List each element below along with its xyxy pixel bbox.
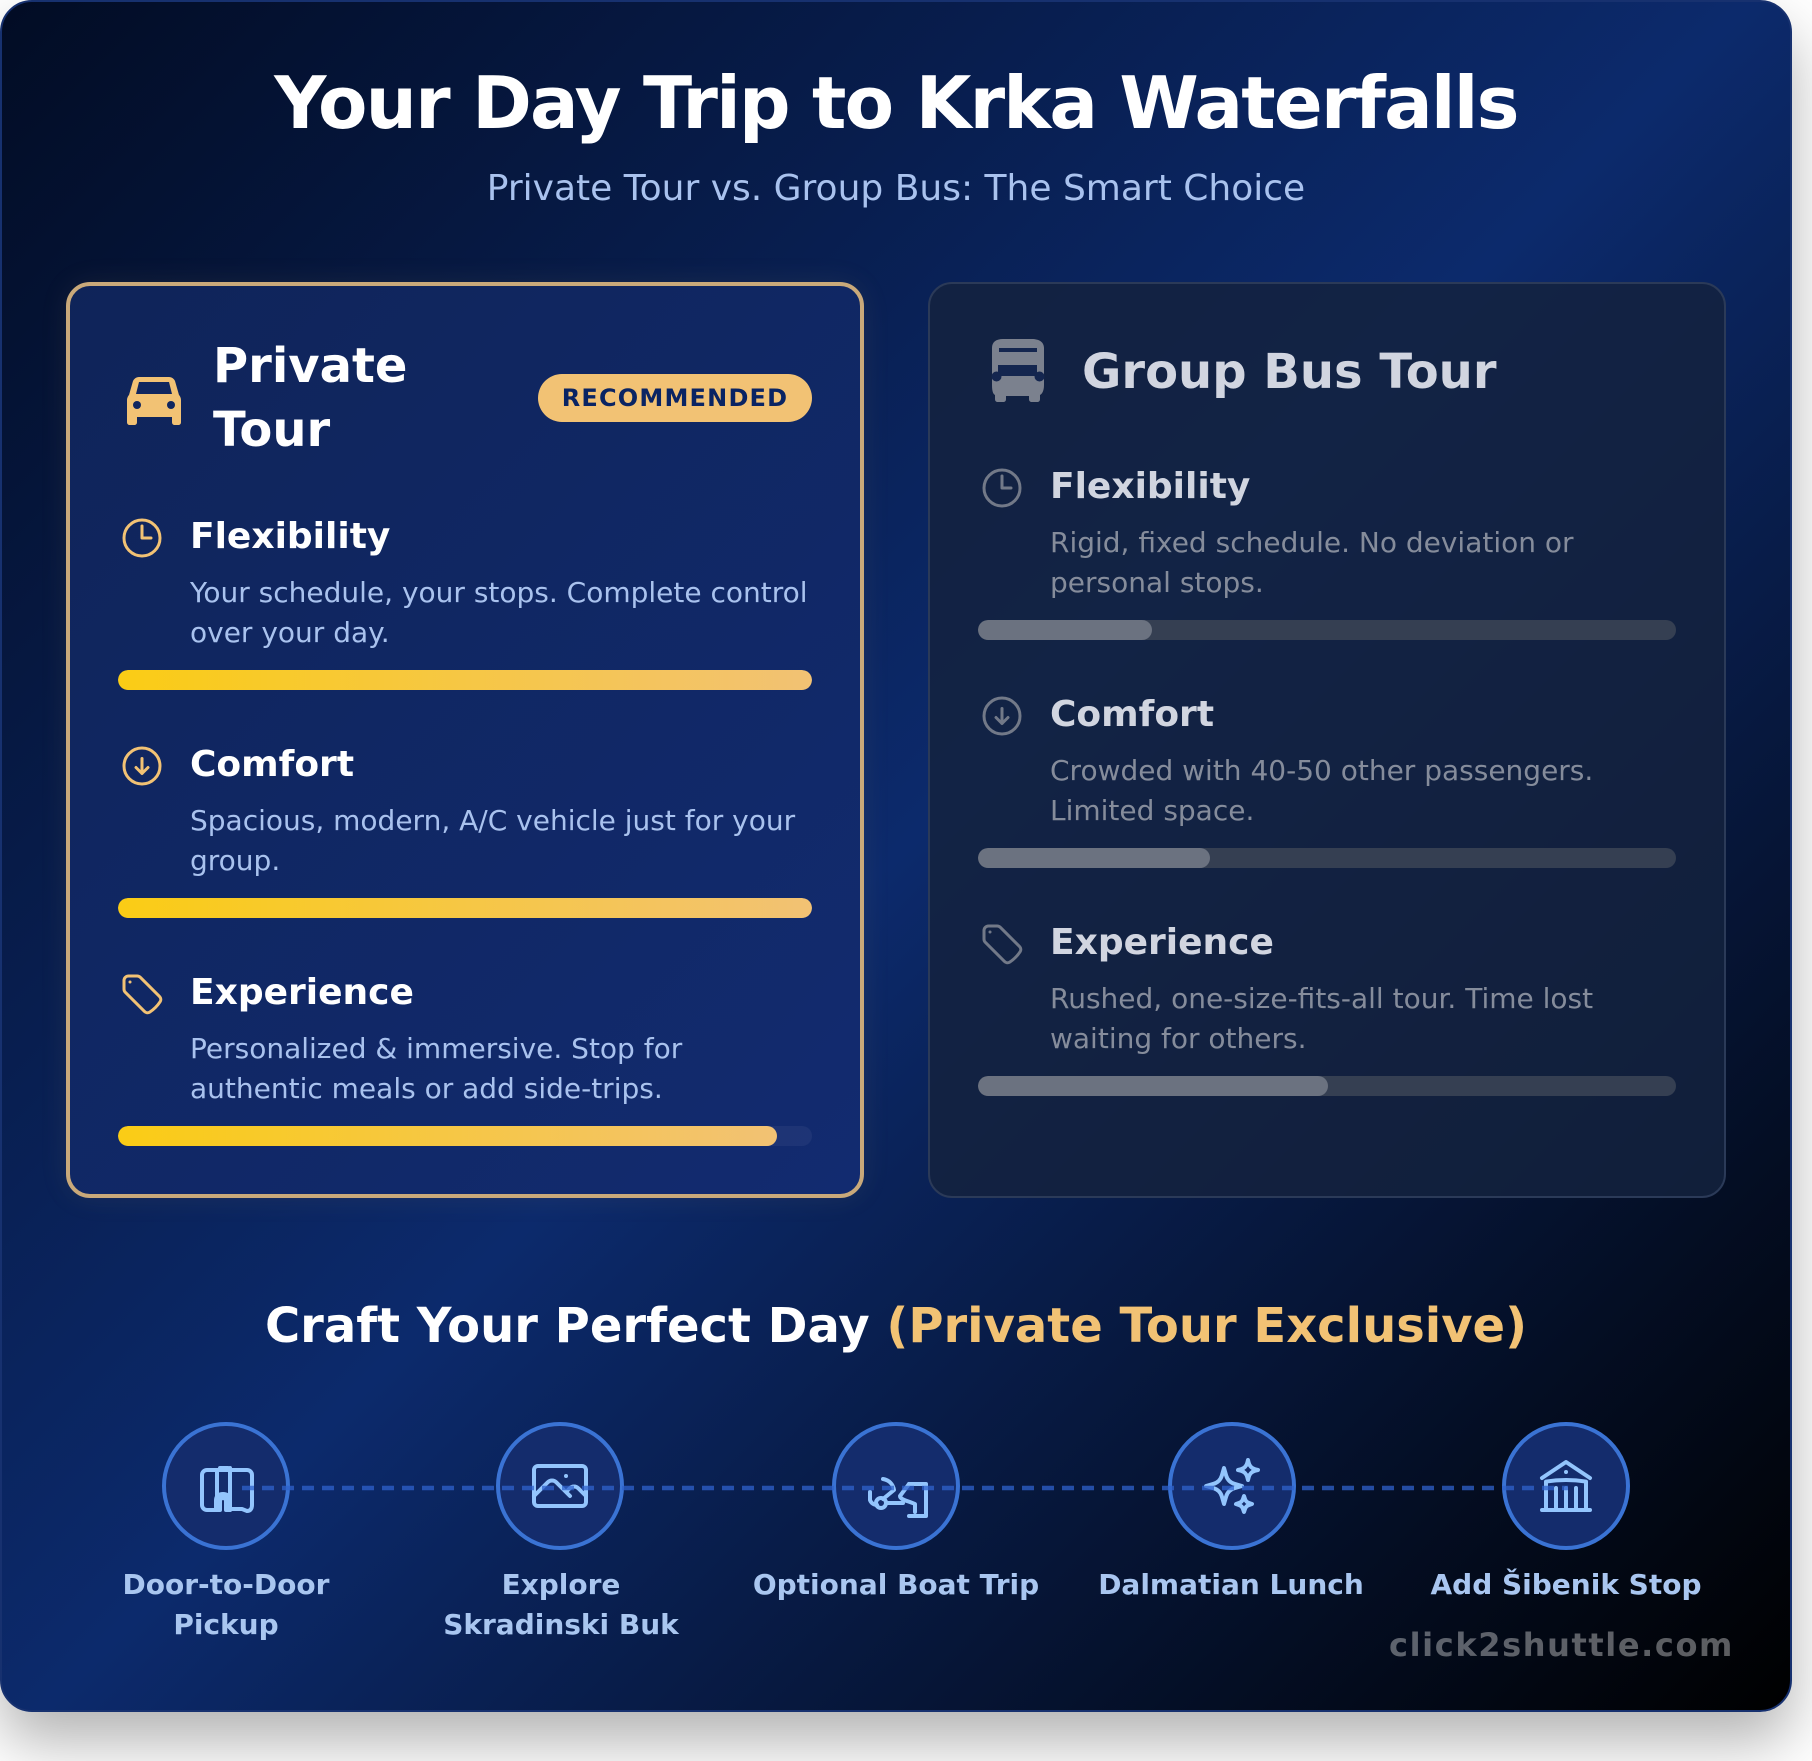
connector: dashed line: [242, 1486, 1568, 1490]
score bar: [118, 670, 812, 690]
step: add sibenik stop: [1430, 1422, 1702, 1601]
watermark: click2shuttle.com: [1389, 1626, 1734, 1664]
icon circle: image: [496, 1422, 624, 1550]
item text: [190, 1032, 682, 1104]
feature: flexibility (group): personal stops.: [1050, 566, 1264, 598]
feature: comfort (group): Limited space.: [1050, 794, 1254, 826]
label: Dalmatian Lunch: [1098, 1568, 1364, 1601]
item title: Flexibility: [190, 516, 390, 557]
badge: recommended: RECOMMENDED: [562, 384, 788, 412]
item title: Experience: [190, 972, 414, 1013]
label: Explore: [502, 1568, 620, 1601]
item text: [190, 804, 796, 876]
step: optional boat trip: [753, 1422, 1039, 1601]
icon: car: [127, 377, 181, 425]
item text: [1050, 526, 1574, 598]
icon: tag: [982, 924, 1022, 964]
feature: comfort (private): group.: [190, 844, 280, 876]
score bar: [118, 1126, 812, 1146]
step: dalmatian lunch: [1098, 1422, 1364, 1601]
feature: experience (private): authentic meals or add side-trips.: [190, 1072, 663, 1104]
item title: Comfort: [190, 744, 354, 785]
feature: experience (group): waiting for others.: [1050, 1022, 1306, 1054]
icon: arrow down circle: [122, 746, 162, 786]
icon: bus: [992, 339, 1044, 402]
badge: recommended: [538, 374, 812, 422]
feature: flexibility (private): [118, 516, 812, 690]
subtitle: Private Tour vs. Group Bus: The Smart Choice: [487, 168, 1305, 209]
icon circle: sparkles: [1168, 1422, 1296, 1550]
item text: Personalized & immersive. Stop for: [190, 1032, 682, 1064]
score bar: [978, 620, 1676, 640]
panel: private tour: [66, 282, 864, 1198]
feature: flexibility (private): over your day.: [190, 616, 390, 648]
item title: Experience: [1050, 922, 1274, 963]
panel: group bus tour: [928, 282, 1726, 1198]
label: Optional Boat Trip: [753, 1568, 1039, 1601]
icon circle: boat: [832, 1422, 960, 1550]
score bar: [978, 848, 1676, 868]
label line 2: Skradinski Buk: [443, 1608, 679, 1641]
item text: [190, 576, 808, 648]
heading: private tour: Tour: [213, 402, 330, 458]
title: Your Day Trip to Krka Waterfalls: [274, 61, 1518, 145]
item text: [1050, 754, 1593, 826]
score bar: [978, 1076, 1676, 1096]
step: explore skradinski buk: [443, 1422, 680, 1641]
item text: Rigid, fixed schedule. No deviation or: [1050, 526, 1574, 558]
step: door-to-door pickup: [123, 1422, 330, 1641]
heading: private tour: [213, 338, 407, 458]
heading: group bus tour: Group Bus Tour: [1082, 344, 1497, 400]
feature: comfort (group): [978, 694, 1676, 868]
item text: Rushed, one-size-fits-all tour. Time lost: [1050, 982, 1593, 1014]
icon circle: door: [162, 1422, 290, 1550]
score bar: [118, 898, 812, 918]
item title: Comfort: [1050, 694, 1214, 735]
item text: Crowded with 40-50 other passengers.: [1050, 754, 1593, 786]
item text: Spacious, modern, A/C vehicle just for your: [190, 804, 795, 836]
icon circle: museum: [1502, 1422, 1630, 1550]
item text: [1050, 982, 1593, 1054]
item title: Flexibility: [1050, 466, 1250, 507]
heading: private tour: Private: [213, 338, 407, 394]
icon: clock: [982, 468, 1022, 508]
feature: comfort (private): [118, 744, 812, 918]
item text: Your schedule, your stops. Complete control: [190, 576, 808, 608]
label: Door-to-Door: [123, 1568, 329, 1601]
icon: arrow down circle: [982, 696, 1022, 736]
feature: experience (private): [118, 972, 812, 1146]
feature: experience (group): [978, 922, 1676, 1096]
icon: tag: [122, 974, 162, 1014]
label line 2: Pickup: [173, 1608, 279, 1641]
feature: flexibility (group): [978, 466, 1676, 640]
section heading: Craft Your Perfect Day (Private Tour Exclusive): [265, 1298, 1527, 1354]
label: Add Šibenik Stop: [1430, 1568, 1702, 1601]
icon: clock: [122, 518, 162, 558]
